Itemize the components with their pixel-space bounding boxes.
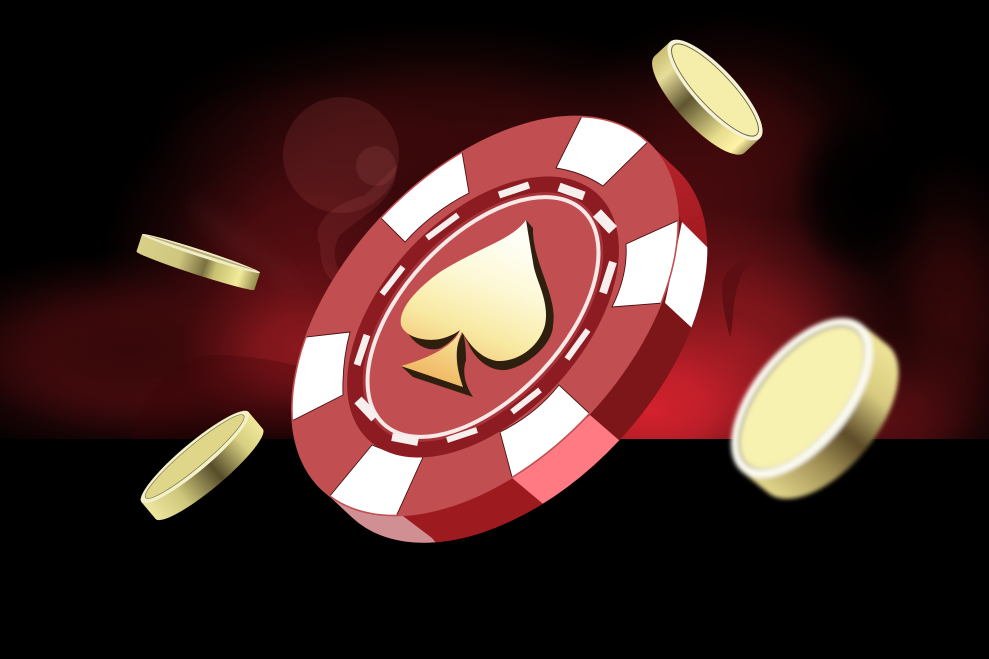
spade: [401, 220, 554, 397]
coin: top right: [639, 27, 775, 167]
ring dashes: [357, 185, 613, 442]
smoke shapes: [132, 97, 768, 440]
chip face: [218, 44, 752, 588]
chip edge: [330, 148, 708, 543]
illustration: poker chip with flying coins: [0, 31, 989, 543]
coin: right blurred: [704, 293, 926, 523]
coin: left upper: [135, 231, 261, 293]
background: black table and red smoke glow: [0, 31, 989, 439]
chip: [291, 116, 708, 543]
coin: left lower: [132, 401, 272, 530]
inner ring: [295, 126, 671, 508]
white edge spots: [292, 117, 678, 515]
